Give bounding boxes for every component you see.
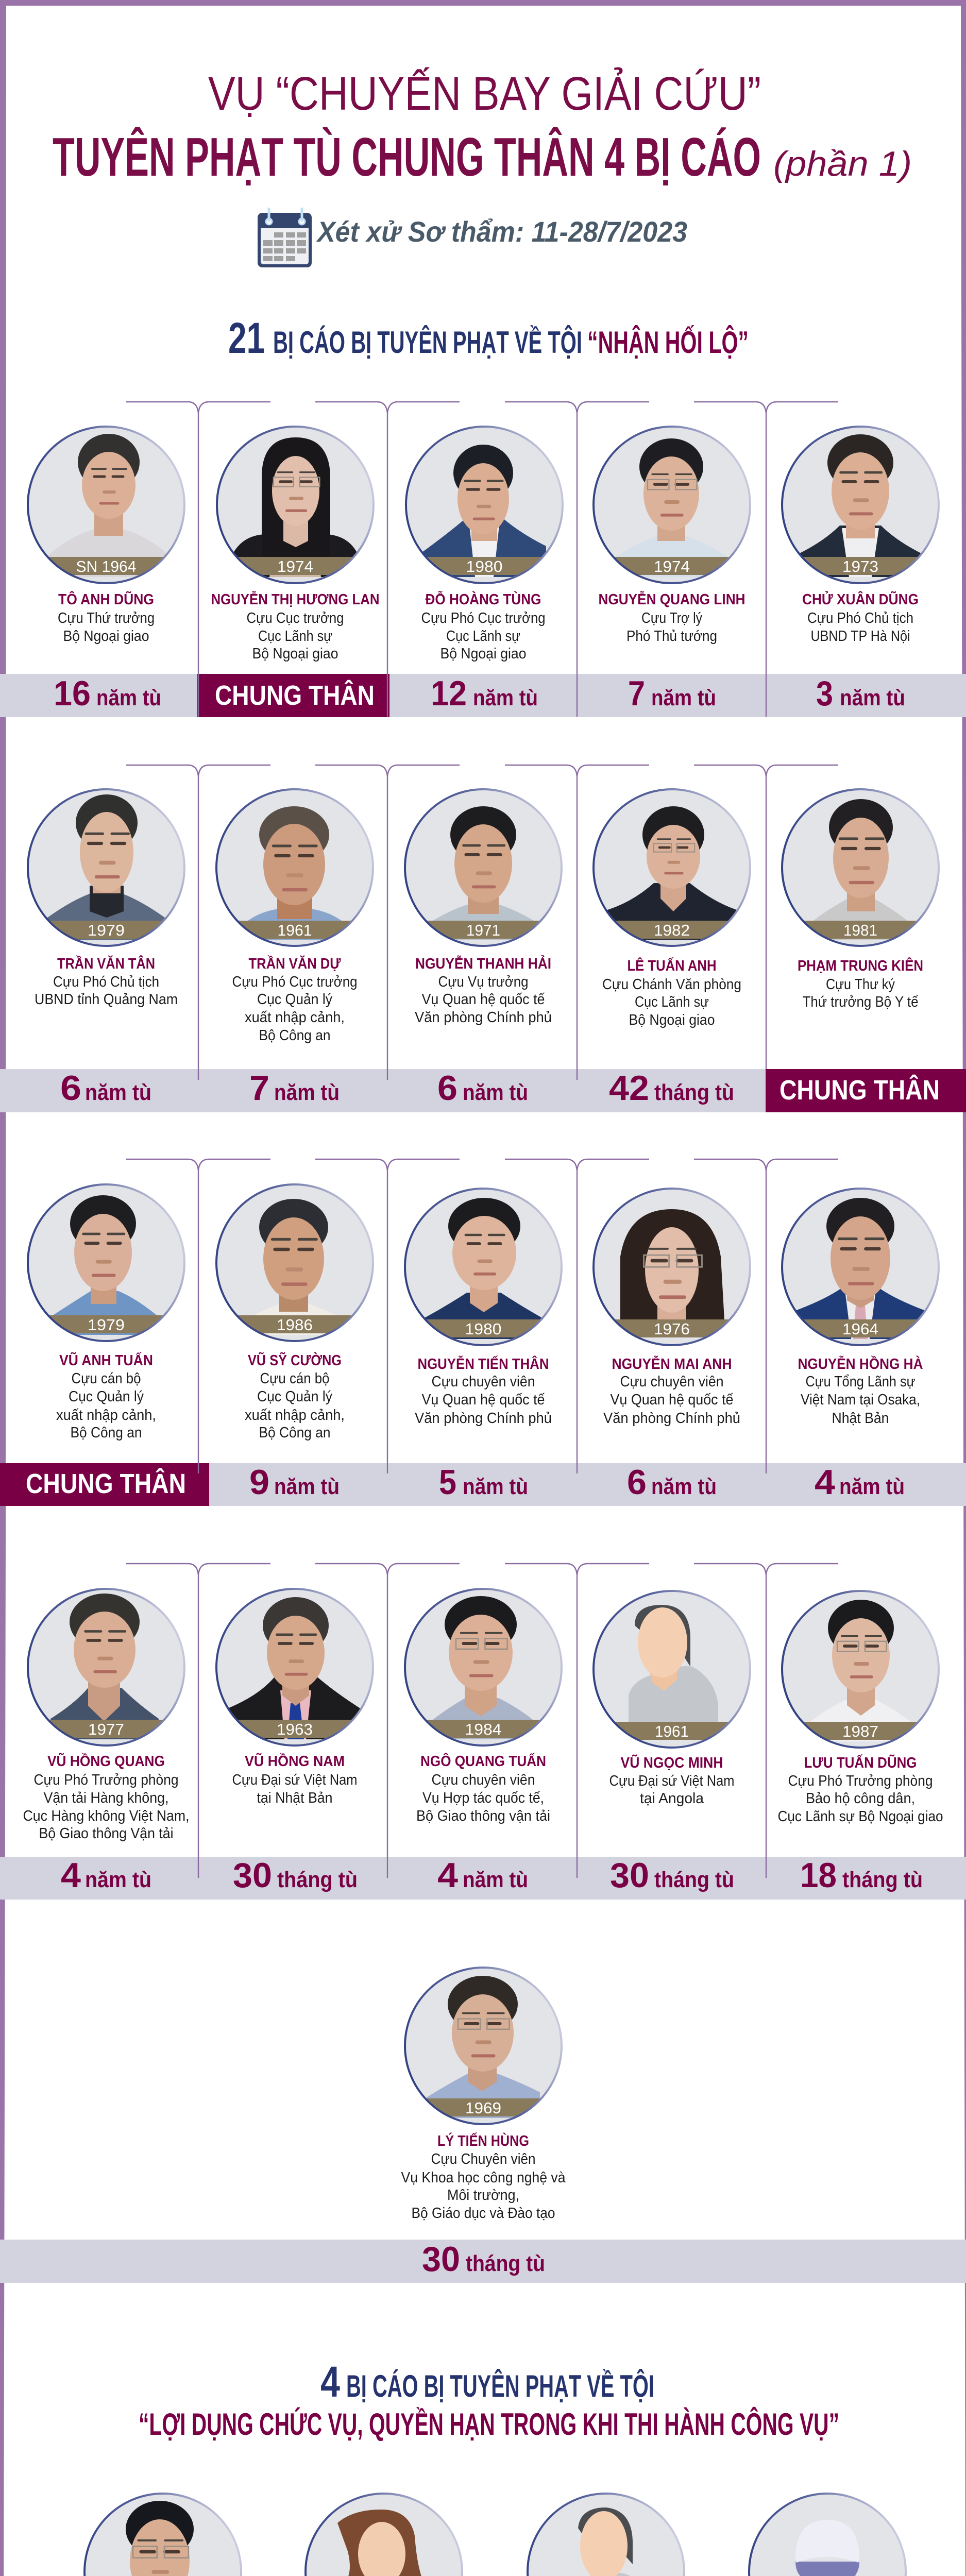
role: UBND tỉnh Quảng Nam — [35, 991, 178, 1008]
card: Đặng Minh Phương — [749, 2494, 906, 2576]
sentence: năm tù — [96, 685, 161, 710]
card: Nguyễn Hồng Hà — [782, 1189, 939, 1502]
sentence: CHUNG THÂN — [779, 1074, 940, 1106]
name: NGUYỄN TIẾN THÂN — [417, 1355, 549, 1372]
role: Bộ Giao thông vận tải — [416, 1808, 550, 1824]
photo: Nguyễn Thanh Hải: 1971 — [466, 921, 500, 939]
name: VŨ HỒNG NAM — [245, 1752, 345, 1770]
sentence: năm tù — [463, 1474, 528, 1499]
role: Cựu chuyên viên — [620, 1374, 723, 1390]
sentence: 42 — [609, 1069, 649, 1108]
role — [245, 1370, 345, 1441]
heading: 21 defendants: BỊ CÁO BỊ TUYÊN PHẠT VỀ TỘI — [273, 325, 582, 360]
sentence — [439, 1463, 528, 1502]
sentence: CHUNG THÂN — [26, 1468, 186, 1499]
role: Cựu Phó Trưởng phòng — [34, 1772, 178, 1788]
title — [53, 66, 912, 188]
heading: 4 defendants: 4 — [320, 2358, 340, 2406]
sentence — [610, 1856, 734, 1895]
card: Nguyễn Quang Linh — [593, 427, 751, 713]
card: Trần Văn Dự — [216, 789, 374, 1108]
role — [23, 1772, 190, 1842]
sentence: 30 — [422, 2240, 460, 2279]
name: VŨ HỒNG QUANG — [47, 1752, 165, 1770]
role — [415, 1374, 552, 1427]
sentence: 4 — [437, 1856, 458, 1895]
name: TRẦN VĂN TÂN — [57, 955, 155, 972]
role: Cục Hàng không Việt Nam, — [23, 1808, 190, 1824]
name: TÔ ANH DŨNG — [58, 590, 154, 608]
sentence — [431, 674, 538, 713]
role: Thứ trưởng Bộ Y tế — [803, 994, 918, 1010]
card: Nguyễn Thị Hương Lan — [197, 427, 389, 717]
name: VŨ SỸ CƯỜNG — [248, 1351, 342, 1369]
role: Bộ Công an — [70, 1425, 142, 1441]
name: LÊ TUẤN ANH — [628, 957, 716, 974]
role: Cựu Chánh Văn phòng — [602, 976, 741, 993]
name: NGUYỄN THANH HẢI — [415, 955, 551, 972]
role: Nhật Bản — [832, 1410, 889, 1427]
name: NGUYỄN HỒNG HÀ — [798, 1355, 923, 1372]
card: Nguyễn Hoàng Linh — [527, 2494, 685, 2576]
role — [778, 1773, 943, 1825]
photo: Trần Văn Tân — [27, 789, 185, 946]
sentence: 12 — [431, 674, 467, 713]
photo: Vũ Sỹ Cường — [216, 1184, 374, 1341]
role — [626, 610, 717, 645]
sentence — [60, 1069, 151, 1108]
photo: Trần Văn Dự: 1961 — [277, 921, 312, 939]
role: Bộ Giao thông Vận tải — [39, 1825, 173, 1842]
name: PHẠM TRUNG KIÊN — [798, 957, 923, 974]
role: Cục Quản lý — [69, 1388, 144, 1405]
role: Cựu Cục trưởng — [246, 610, 344, 626]
name: LÝ TIẾN HÙNG — [437, 2132, 529, 2149]
photo: Trần Văn Dự — [216, 789, 374, 946]
photo: Nguyễn Tiến Thân: 1980 — [465, 1320, 502, 1338]
sentence — [816, 674, 905, 713]
sentence: năm tù — [839, 1474, 905, 1499]
role — [807, 610, 913, 645]
photo: Lý Tiến Hùng — [404, 1968, 562, 2124]
card: Nguyễn Mai Anh — [593, 1189, 751, 1502]
sentence: 6 — [60, 1069, 81, 1108]
role: Cựu chuyên viên — [432, 1374, 535, 1390]
heading: 21 defendants — [228, 314, 749, 362]
role: Văn phòng Chính phủ — [415, 1009, 552, 1026]
photo: Nguyễn Thị Hương Lan: 1974 — [277, 557, 313, 575]
sentence — [249, 1463, 340, 1502]
photo: Lưu Tuấn Dũng — [782, 1591, 939, 1748]
role: tại Angola — [640, 1790, 704, 1807]
role: Cục Lãnh sự — [446, 628, 520, 645]
name: TRẦN VĂN DỰ — [248, 955, 341, 972]
card: Ngô Quang Tuấn — [404, 1589, 562, 1895]
role: Bộ Giáo dục và Đào tạo — [411, 2205, 555, 2222]
role: Vụ Quan hệ quốc tế — [421, 1392, 545, 1408]
sentence: 18 — [800, 1856, 837, 1895]
sentence — [628, 674, 716, 713]
photo: Vũ Hồng Quang: 1977 — [88, 1720, 124, 1738]
sentence — [627, 1463, 717, 1502]
role — [801, 1374, 920, 1427]
role — [602, 976, 741, 1028]
name: CHỬ XUÂN DŨNG — [802, 590, 919, 608]
sentence: 4 — [815, 1463, 835, 1502]
heading: 21 defendants: 21 — [228, 314, 265, 362]
sentence — [0, 1463, 209, 1506]
role — [421, 610, 545, 662]
role — [232, 1772, 358, 1806]
role — [246, 610, 344, 662]
role: Cựu Phó Trưởng phòng — [788, 1773, 933, 1789]
photo: Đỗ Hoàng Tùng: 1980 — [466, 557, 503, 575]
role — [35, 974, 178, 1008]
photo: Đỗ Hoàng Tùng — [405, 427, 563, 583]
role: Cựu Thứ trưởng — [58, 610, 155, 626]
sentence: tháng tù — [654, 1867, 734, 1892]
role: Văn phòng Chính phủ — [603, 1410, 740, 1427]
photo: Nguyễn Mai Anh: 1976 — [654, 1320, 690, 1338]
role: tại Nhật Bản — [257, 1790, 333, 1806]
sentence: năm tù — [840, 685, 905, 710]
role: Bộ Ngoại giao — [63, 628, 149, 645]
photo: Nguyễn Lê Ngọc Anh (placeholder avatar) — [305, 2494, 463, 2576]
sentence — [54, 674, 161, 713]
heading: 21 defendants: “NHẬN HỐI LỘ” — [587, 325, 749, 360]
name: NGUYỄN QUANG LINH — [599, 590, 745, 608]
photo: Phạm Trung Kiên — [782, 789, 939, 946]
photo: Nguyễn Hồng Hà — [782, 1189, 939, 1345]
photo: Vũ Sỹ Cường: 1986 — [277, 1316, 313, 1334]
photo: Tô Anh Dũng — [27, 427, 185, 583]
sentence — [815, 1463, 905, 1502]
photo: Tô Anh Dũng: SN 1964 — [76, 557, 136, 575]
sentence — [249, 1069, 340, 1108]
photo: Lưu Tuấn Dũng: 1987 — [842, 1722, 878, 1740]
card: Vũ Hồng Nam — [216, 1589, 374, 1895]
sentence: năm tù — [274, 1080, 340, 1105]
photo: Nguyễn Quang Linh — [593, 427, 751, 583]
photo: Nguyễn Mai Anh — [593, 1189, 751, 1345]
sentence: 5 — [439, 1463, 456, 1502]
role: xuất nhập cảnh, — [245, 1407, 345, 1423]
column dividers row 1 — [126, 402, 838, 717]
role: Cựu Vụ trưởng — [438, 974, 529, 990]
sentence: năm tù — [651, 1474, 717, 1499]
sentence: 4 — [61, 1856, 81, 1895]
role: Cục Lãnh sự — [635, 994, 709, 1010]
role — [803, 976, 918, 1010]
heading: 4 defendants: BỊ CÁO BỊ TUYÊN PHẠT VỀ TỘI — [346, 2369, 654, 2403]
role — [56, 1370, 156, 1441]
column dividers row 2 — [126, 765, 838, 1080]
card: Đỗ Hoàng Tùng — [405, 427, 563, 713]
photo: Nguyễn Hoàng Linh (placeholder avatar) — [527, 2494, 685, 2576]
card: Trần Việt Thái — [84, 2494, 242, 2576]
role: Cựu chuyên viên — [432, 1772, 535, 1788]
name: VŨ ANH TUẤN — [59, 1351, 153, 1369]
card: Vũ Ngọc Minh — [593, 1591, 751, 1895]
photo: Trần Văn Tân: 1979 — [88, 921, 125, 939]
role: Cựu Phó Chủ tịch — [807, 610, 913, 626]
sentence: năm tù — [473, 685, 538, 710]
name: LƯU TUẤN DŨNG — [804, 1754, 917, 1771]
sentence: năm tù — [274, 1474, 340, 1499]
role: UBND TP Hà Nội — [811, 628, 910, 645]
sentence — [422, 2240, 545, 2279]
photo: Nguyễn Thị Hương Lan — [216, 427, 374, 583]
card: Nguyễn Lê Ngọc Anh — [305, 2494, 463, 2576]
icon: calendar — [258, 208, 312, 267]
photo: Vũ Hồng Nam: 1963 — [277, 1720, 313, 1738]
photo: Ngô Quang Tuấn: 1984 — [465, 1720, 502, 1738]
role: Cục Quản lý — [257, 991, 332, 1008]
role: Cục Quản lý — [257, 1388, 332, 1405]
photo: Nguyễn Tiến Thân — [404, 1189, 562, 1345]
role: Cựu cán bộ — [71, 1370, 141, 1387]
card: Tô Anh Dũng — [27, 427, 185, 713]
role — [415, 974, 552, 1026]
card: Lưu Tuấn Dũng — [778, 1591, 943, 1895]
photo: Đặng Minh Phương (placeholder avatar) — [749, 2494, 906, 2576]
sentence: 3 — [816, 674, 833, 713]
role: Bộ Công an — [259, 1027, 331, 1044]
title: VỤ “CHUYẾN BAY GIẢI CỨU” — [208, 66, 761, 120]
photo: Vũ Hồng Quang — [27, 1589, 185, 1745]
card: Vũ Sỹ Cường — [216, 1184, 374, 1502]
card: Nguyễn Tiến Thân — [404, 1189, 562, 1502]
role: Cục Lãnh sự — [258, 628, 332, 645]
card: Lý Tiến Hùng — [401, 1968, 566, 2279]
photo: Ngô Quang Tuấn — [404, 1589, 562, 1745]
sentence: 30 — [610, 1856, 649, 1895]
role — [603, 1374, 740, 1427]
role: Bộ Công an — [259, 1425, 331, 1441]
role — [609, 1773, 735, 1807]
role: Bảo hộ công dân, — [806, 1790, 915, 1807]
role — [232, 974, 358, 1044]
sentence: năm tù — [463, 1867, 528, 1892]
role: Việt Nam tại Osaka, — [801, 1392, 920, 1408]
sentence: tháng tù — [277, 1867, 358, 1892]
role: Cựu Thư ký — [826, 976, 895, 993]
card: Trần Văn Tân — [27, 789, 185, 1108]
sentence — [609, 1069, 734, 1108]
sentence: năm tù — [85, 1080, 151, 1105]
role: Vận tải Hàng không, — [43, 1790, 169, 1806]
sentence — [233, 1856, 358, 1895]
sentence: 16 — [54, 674, 91, 713]
sentence: 7 — [628, 674, 645, 713]
role: Bộ Ngoại giao — [252, 646, 338, 662]
photo: Chử Xuân Dũng: 1973 — [842, 557, 878, 575]
sentence — [197, 674, 389, 717]
sentence — [800, 1856, 923, 1895]
role: Cựu Đại sứ Việt Nam — [232, 1772, 358, 1788]
photo: Nguyễn Thanh Hải — [404, 789, 562, 946]
trial dates: Xét xử Sơ thẩm: 11-28/7/2023 — [316, 215, 687, 248]
photo: Vũ Anh Tuấn: 1979 — [88, 1316, 125, 1334]
name: VŨ NGỌC MINH — [620, 1754, 723, 1771]
role: Vụ Hợp tác quốc tế, — [422, 1790, 544, 1806]
sentence: tháng tù — [842, 1867, 923, 1892]
role: Môi trường, — [447, 2187, 519, 2204]
role: Vụ Khoa học công nghệ và — [401, 2170, 566, 2186]
role — [58, 610, 155, 645]
photo: Lê Tuấn Anh: 1982 — [654, 921, 690, 939]
sentence: năm tù — [463, 1080, 528, 1105]
name: ĐỖ HOÀNG TÙNG — [426, 590, 541, 608]
role — [401, 2151, 566, 2222]
role — [416, 1772, 550, 1824]
photo: Nguyễn Quang Linh: 1974 — [654, 557, 690, 575]
photo: Vũ Ngọc Minh — [593, 1591, 751, 1748]
sentence: 30 — [233, 1856, 272, 1895]
sentence bands — [0, 674, 966, 2576]
name: NGÔ QUANG TUẤN — [420, 1752, 546, 1770]
sentence: 7 — [249, 1069, 269, 1108]
role: Cựu Phó Cục trưởng — [232, 974, 358, 990]
sentence: 6 — [437, 1069, 457, 1108]
title: (phần 1) — [773, 144, 912, 183]
sentence: tháng tù — [466, 2251, 545, 2276]
role: Cục Lãnh sự Bộ Ngoại giao — [778, 1808, 943, 1825]
photo: Nguyễn Hồng Hà: 1964 — [842, 1320, 878, 1338]
role: Cựu Đại sứ Việt Nam — [609, 1773, 735, 1789]
photo: Lý Tiến Hùng: 1969 — [465, 2099, 501, 2117]
role: Vụ Quan hệ quốc tế — [421, 991, 545, 1008]
heading: 4 defendants — [139, 2358, 839, 2442]
role: xuất nhập cảnh, — [56, 1407, 156, 1423]
role: Văn phòng Chính phủ — [415, 1410, 552, 1427]
role: Cựu Chuyên viên — [431, 2151, 536, 2167]
photo: Vũ Hồng Nam — [216, 1589, 374, 1745]
photo: Vũ Ngọc Minh: 1961 — [655, 1722, 689, 1740]
sentence: CHUNG THÂN — [215, 680, 375, 711]
photo: Phạm Trung Kiên: 1981 — [843, 921, 877, 939]
role: Phó Thủ tướng — [626, 628, 717, 645]
sentence: 9 — [249, 1463, 269, 1502]
role: Vụ Quan hệ quốc tế — [610, 1392, 734, 1408]
photo: Lê Tuấn Anh — [593, 789, 751, 946]
role: xuất nhập cảnh, — [245, 1009, 345, 1026]
sentence — [437, 1069, 528, 1108]
card: Lê Tuấn Anh — [593, 789, 751, 1108]
sentence: 6 — [627, 1463, 647, 1502]
sentence — [61, 1856, 151, 1895]
role: Cựu Trợ lý — [641, 610, 702, 626]
role: Cựu cán bộ — [260, 1370, 330, 1387]
sentence: năm tù — [85, 1867, 151, 1892]
card: Chử Xuân Dũng — [782, 427, 939, 713]
card: Vũ Anh Tuấn — [0, 1184, 209, 1506]
photo: Chử Xuân Dũng — [782, 427, 939, 583]
card: Nguyễn Thanh Hải — [404, 789, 562, 1108]
column dividers row 3 — [126, 1159, 838, 1473]
role: Cựu Phó Chủ tịch — [53, 974, 159, 990]
photo: Vũ Anh Tuấn — [27, 1184, 185, 1341]
column dividers row 4 — [126, 1564, 838, 1878]
role: Cựu Phó Cục trưởng — [421, 610, 545, 626]
sentence: tháng tù — [654, 1080, 734, 1105]
role: Bộ Ngoại giao — [629, 1012, 715, 1028]
name: NGUYỄN MAI ANH — [612, 1355, 732, 1372]
name: NGUYỄN THỊ HƯƠNG LAN — [211, 590, 379, 608]
photo: Trần Việt Thái — [84, 2494, 242, 2576]
role: Cựu Tổng Lãnh sự — [806, 1374, 915, 1390]
card: Phạm Trung Kiên — [766, 789, 966, 1112]
card: Vũ Hồng Quang — [23, 1589, 190, 1895]
sentence — [766, 1069, 966, 1112]
sentence: năm tù — [651, 685, 716, 710]
sentence — [437, 1856, 528, 1895]
role: Bộ Ngoại giao — [440, 646, 527, 662]
